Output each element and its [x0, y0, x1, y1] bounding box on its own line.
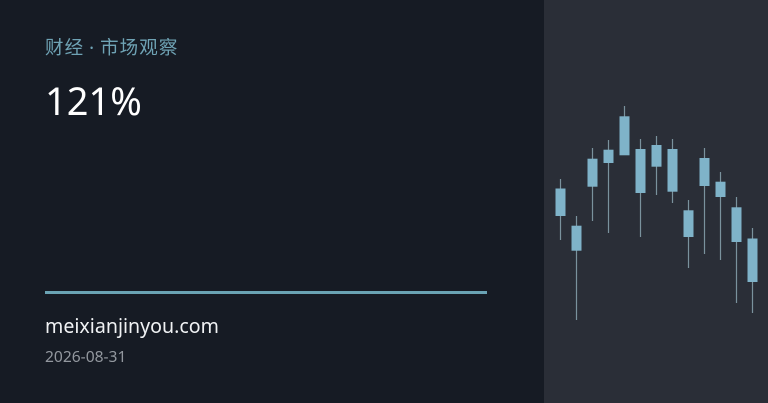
panel: right chart background: [544, 0, 768, 403]
text: website domain: meixianjinyou.com: [45, 312, 219, 339]
candlestick chart: [556, 106, 758, 320]
panel: left background: [0, 0, 544, 403]
accent line: [45, 291, 487, 294]
heading: category label: 财经 · 市场观察: [45, 34, 178, 60]
text: date: 2026-08-31: [45, 345, 126, 367]
headline number: 121%: [45, 75, 142, 127]
